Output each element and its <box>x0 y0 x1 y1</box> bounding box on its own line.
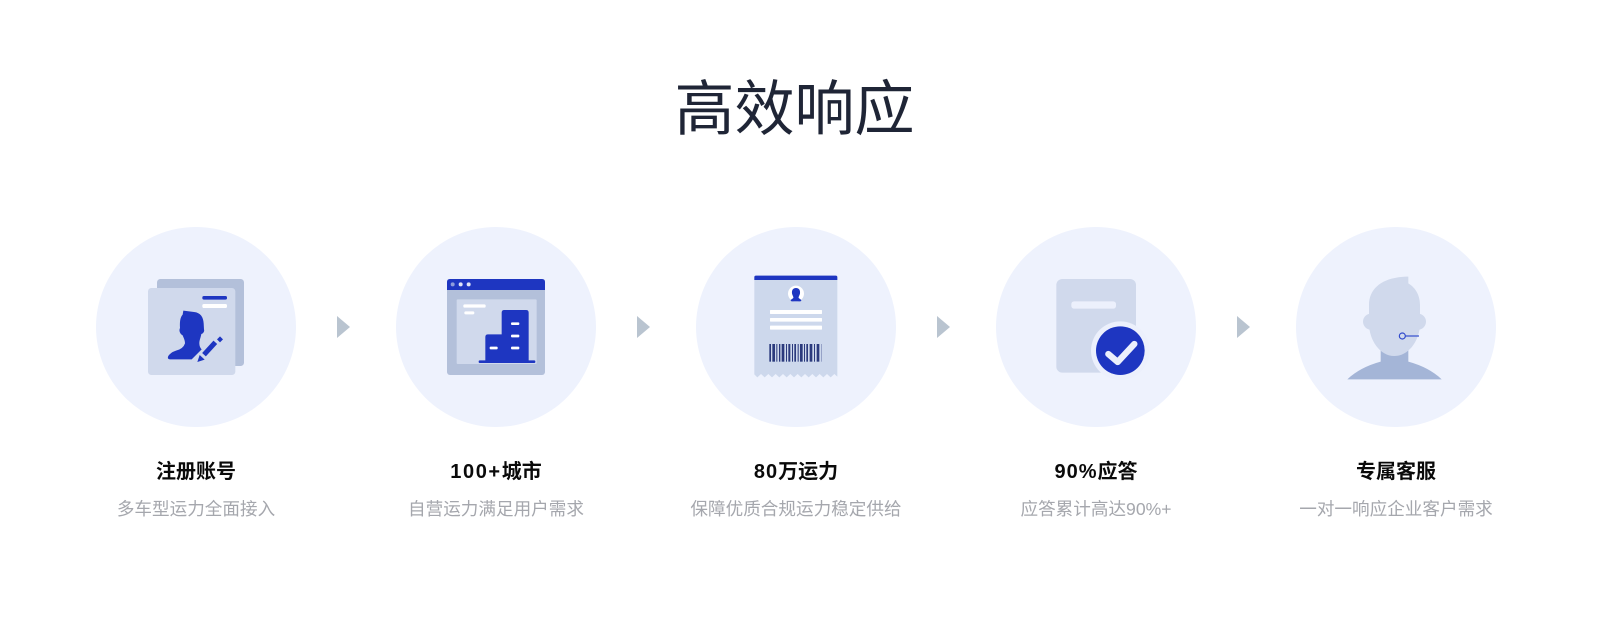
icon: browser window with buildings <box>447 279 545 375</box>
icon: receipt with barcode <box>754 276 838 378</box>
title: 高效响应 <box>674 76 914 143</box>
heading: 100+城市 <box>450 461 542 483</box>
description: 自营运力满足用户需求 <box>408 499 584 519</box>
arrow 4 <box>1237 316 1250 338</box>
icon circle: register <box>96 227 296 427</box>
icon: account card with person and pen <box>148 279 244 375</box>
panel: 90%应答 <box>996 227 1196 519</box>
heading: 90%应答 <box>1054 461 1138 483</box>
panel: 80万运力 <box>690 227 902 519</box>
panel: 专属客服 <box>1296 227 1496 519</box>
panel: 注册账号 <box>96 227 296 519</box>
description: 应答累计高达90%+ <box>1020 499 1172 519</box>
heading: 专属客服 <box>1356 461 1436 483</box>
arrow 3 <box>937 316 950 338</box>
description: 多车型运力全面接入 <box>117 499 275 519</box>
panel: 100+城市 <box>396 227 596 519</box>
heading: 80万运力 <box>754 461 838 483</box>
icon: document with check badge <box>1056 279 1145 375</box>
description: 保障优质合规运力稳定供给 <box>690 499 902 519</box>
icon circle: service <box>1296 227 1496 427</box>
arrow 2 <box>637 316 650 338</box>
icon circle: response <box>996 227 1196 427</box>
icon circle: cities <box>396 227 596 427</box>
icon: agent with headset mic <box>1348 276 1442 380</box>
icon circle: capacity <box>696 227 896 427</box>
heading: 注册账号 <box>156 461 236 483</box>
description: 一对一响应企业客户需求 <box>1299 499 1493 519</box>
arrow 1 <box>337 316 350 338</box>
